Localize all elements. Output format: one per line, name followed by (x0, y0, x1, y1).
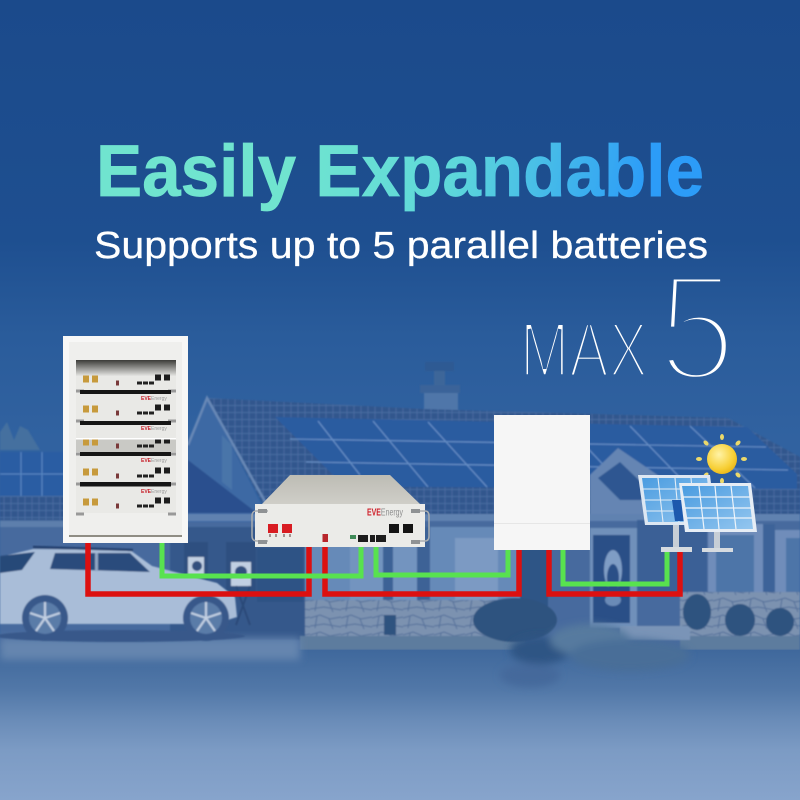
fascia (186, 514, 800, 521)
windows (305, 524, 800, 612)
driveway (0, 638, 300, 660)
red cables (88, 540, 680, 594)
roof solar array (275, 417, 797, 489)
foreground shrubs (500, 624, 690, 687)
handles (252, 511, 429, 541)
dark recess (257, 548, 303, 602)
house scene photo (0, 362, 800, 650)
gable (186, 398, 270, 522)
walls (0, 520, 800, 650)
dark carport wall (170, 527, 305, 640)
left neighbouring roof solar (0, 452, 64, 522)
steps and lawn (300, 626, 800, 650)
main roof (207, 398, 800, 514)
ground fade (0, 650, 800, 800)
stacked batteries: EVEEnergy (141, 458, 167, 464)
main battery unit (252, 475, 429, 547)
door (590, 528, 637, 628)
max 5 label (520, 242, 736, 413)
roof gable edge (188, 398, 267, 505)
trees at left (0, 422, 40, 450)
front panel (679, 483, 757, 552)
chargers (184, 542, 256, 625)
chimney (420, 362, 464, 420)
black terminals (389, 524, 413, 533)
shrubs on wall (384, 594, 794, 642)
battery logo: EVEEnergy (367, 506, 403, 518)
left fascia (0, 521, 186, 527)
red terminals (268, 524, 292, 537)
front gable (590, 448, 700, 514)
icon: solar panels (638, 475, 757, 552)
battery top (262, 475, 420, 504)
battery front (255, 504, 425, 547)
max 5 label: MAX (520, 306, 648, 394)
stone wall (305, 592, 800, 638)
battery cabinet (63, 336, 188, 543)
handle brackets (258, 509, 420, 544)
max 5 label: 5 (658, 242, 736, 413)
icon: sun (696, 434, 747, 484)
stacked batteries: EVEEnergy (141, 396, 167, 402)
stacked batteries: EVEEnergy (141, 489, 167, 495)
inverter (494, 415, 590, 550)
stacked batteries: EVEEnergy (141, 426, 167, 432)
stacked batteries (76, 360, 176, 516)
green cables (162, 540, 667, 584)
title: Easily Expandable (96, 131, 704, 212)
switch (322, 534, 328, 542)
subtitle: Supports up to 5 parallel batteries (94, 225, 708, 267)
back panel (638, 475, 716, 552)
car (0, 547, 245, 642)
porch column (637, 520, 707, 595)
ports (350, 535, 386, 542)
